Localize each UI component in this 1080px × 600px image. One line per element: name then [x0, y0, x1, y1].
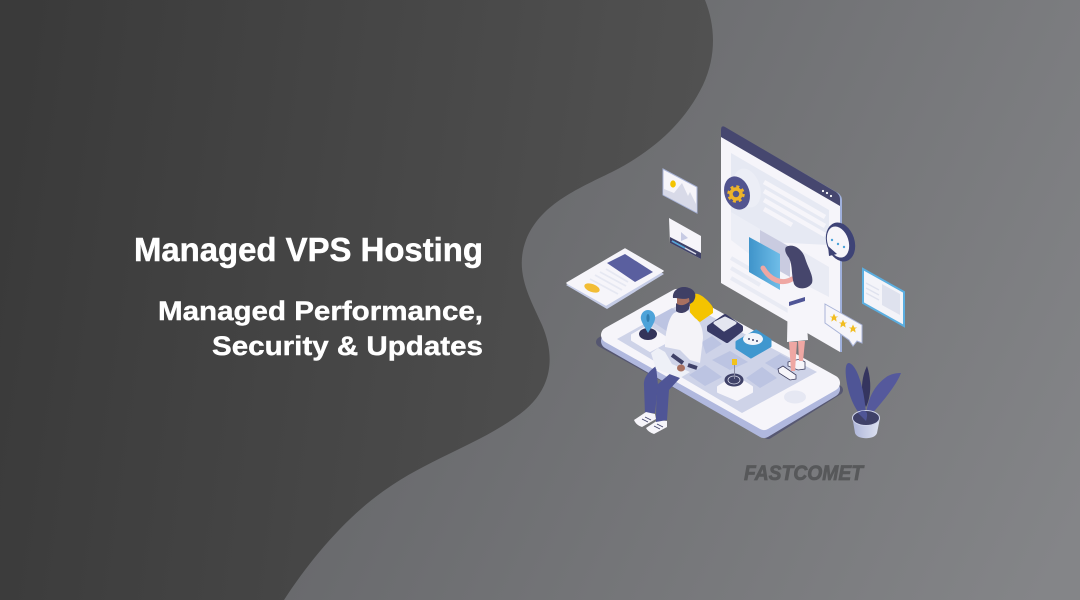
blue web card — [863, 269, 904, 326]
bubble tail — [828, 246, 837, 256]
man hand — [677, 364, 685, 372]
yellow app tile — [690, 294, 713, 322]
man front leg — [656, 372, 680, 422]
target pin — [734, 361, 736, 379]
man sitting — [634, 287, 703, 434]
video progress — [672, 241, 696, 254]
dress belt — [789, 297, 805, 306]
tile base — [709, 316, 741, 341]
target base — [718, 376, 752, 400]
woman left shoe — [778, 366, 796, 380]
document lines — [590, 269, 628, 294]
gear icon — [731, 189, 741, 199]
pin shadow disc — [639, 328, 657, 340]
document face — [567, 249, 663, 305]
plant back leaf — [862, 366, 870, 407]
content panel top — [731, 153, 829, 245]
target app tile — [718, 359, 752, 400]
gear badge — [720, 165, 766, 213]
screen tiles — [650, 308, 795, 388]
browser page — [721, 133, 840, 352]
document edge — [566, 251, 664, 309]
phone face — [609, 297, 832, 422]
laptop — [651, 348, 690, 378]
progress fill — [672, 241, 685, 248]
woman — [763, 246, 812, 380]
dark chat app tile — [709, 316, 741, 341]
isometric illustration — [566, 126, 904, 438]
bubble outer — [821, 219, 860, 265]
location pin tile — [632, 310, 665, 351]
message dots — [748, 338, 758, 342]
FASTCOMET logo: FASTCOMET — [744, 462, 865, 485]
man beard — [676, 301, 690, 313]
bubble inner — [823, 224, 853, 260]
browser title bar — [721, 126, 840, 206]
document card — [566, 249, 664, 309]
man hair — [673, 287, 695, 304]
woman arm — [763, 268, 792, 282]
grey back card — [760, 230, 790, 277]
man sleeve cuffs — [672, 355, 697, 368]
image card — [663, 169, 697, 213]
rating stars — [830, 314, 857, 333]
man face — [677, 296, 690, 312]
shoe laces — [642, 417, 663, 429]
web card lines — [866, 283, 879, 300]
plant stem leaf — [858, 411, 867, 421]
browser side — [722, 127, 842, 352]
content panel right — [800, 250, 829, 297]
home button — [784, 390, 806, 404]
title: Managed VPS Hosting — [134, 231, 483, 268]
document pill — [583, 282, 601, 294]
image sun — [670, 180, 676, 188]
tile face — [715, 318, 735, 330]
woman right shoe — [788, 359, 805, 370]
plant left leaf — [846, 363, 866, 420]
man shirt — [665, 308, 703, 363]
target rings — [724, 374, 744, 386]
web card panel — [882, 284, 900, 315]
man shoes — [634, 412, 667, 434]
video card — [669, 218, 701, 259]
target flag — [732, 359, 737, 365]
text lines — [764, 182, 825, 235]
message bubble — [743, 333, 763, 345]
phone edge — [609, 303, 832, 430]
lower text lines — [731, 258, 790, 312]
blue message app tile — [737, 331, 770, 357]
image mountains — [664, 183, 696, 212]
phone screen — [617, 302, 817, 413]
pot opening — [852, 410, 880, 426]
video bar — [670, 237, 701, 259]
woman hair — [785, 246, 812, 288]
plant pot — [852, 418, 880, 438]
blue card — [749, 237, 780, 290]
potted plant — [846, 363, 901, 438]
woman dress — [787, 286, 808, 342]
speech bubble — [821, 219, 860, 265]
dark wave shape — [0, 0, 713, 600]
location pin — [641, 310, 655, 333]
content panel lower — [731, 212, 760, 262]
browser window — [720, 126, 842, 352]
plant right leaf — [866, 373, 901, 420]
review card — [825, 304, 862, 346]
document image — [607, 254, 653, 282]
man back leg — [644, 366, 658, 414]
phone platform — [601, 297, 838, 434]
play icon — [681, 232, 688, 241]
subtitle line two: Security & Updates — [212, 331, 483, 361]
subtitle line one: Managed Performance, — [158, 296, 483, 326]
window dots — [822, 190, 832, 197]
woman legs — [789, 341, 805, 371]
phone shadow — [601, 300, 838, 434]
bubble dots — [831, 239, 845, 248]
